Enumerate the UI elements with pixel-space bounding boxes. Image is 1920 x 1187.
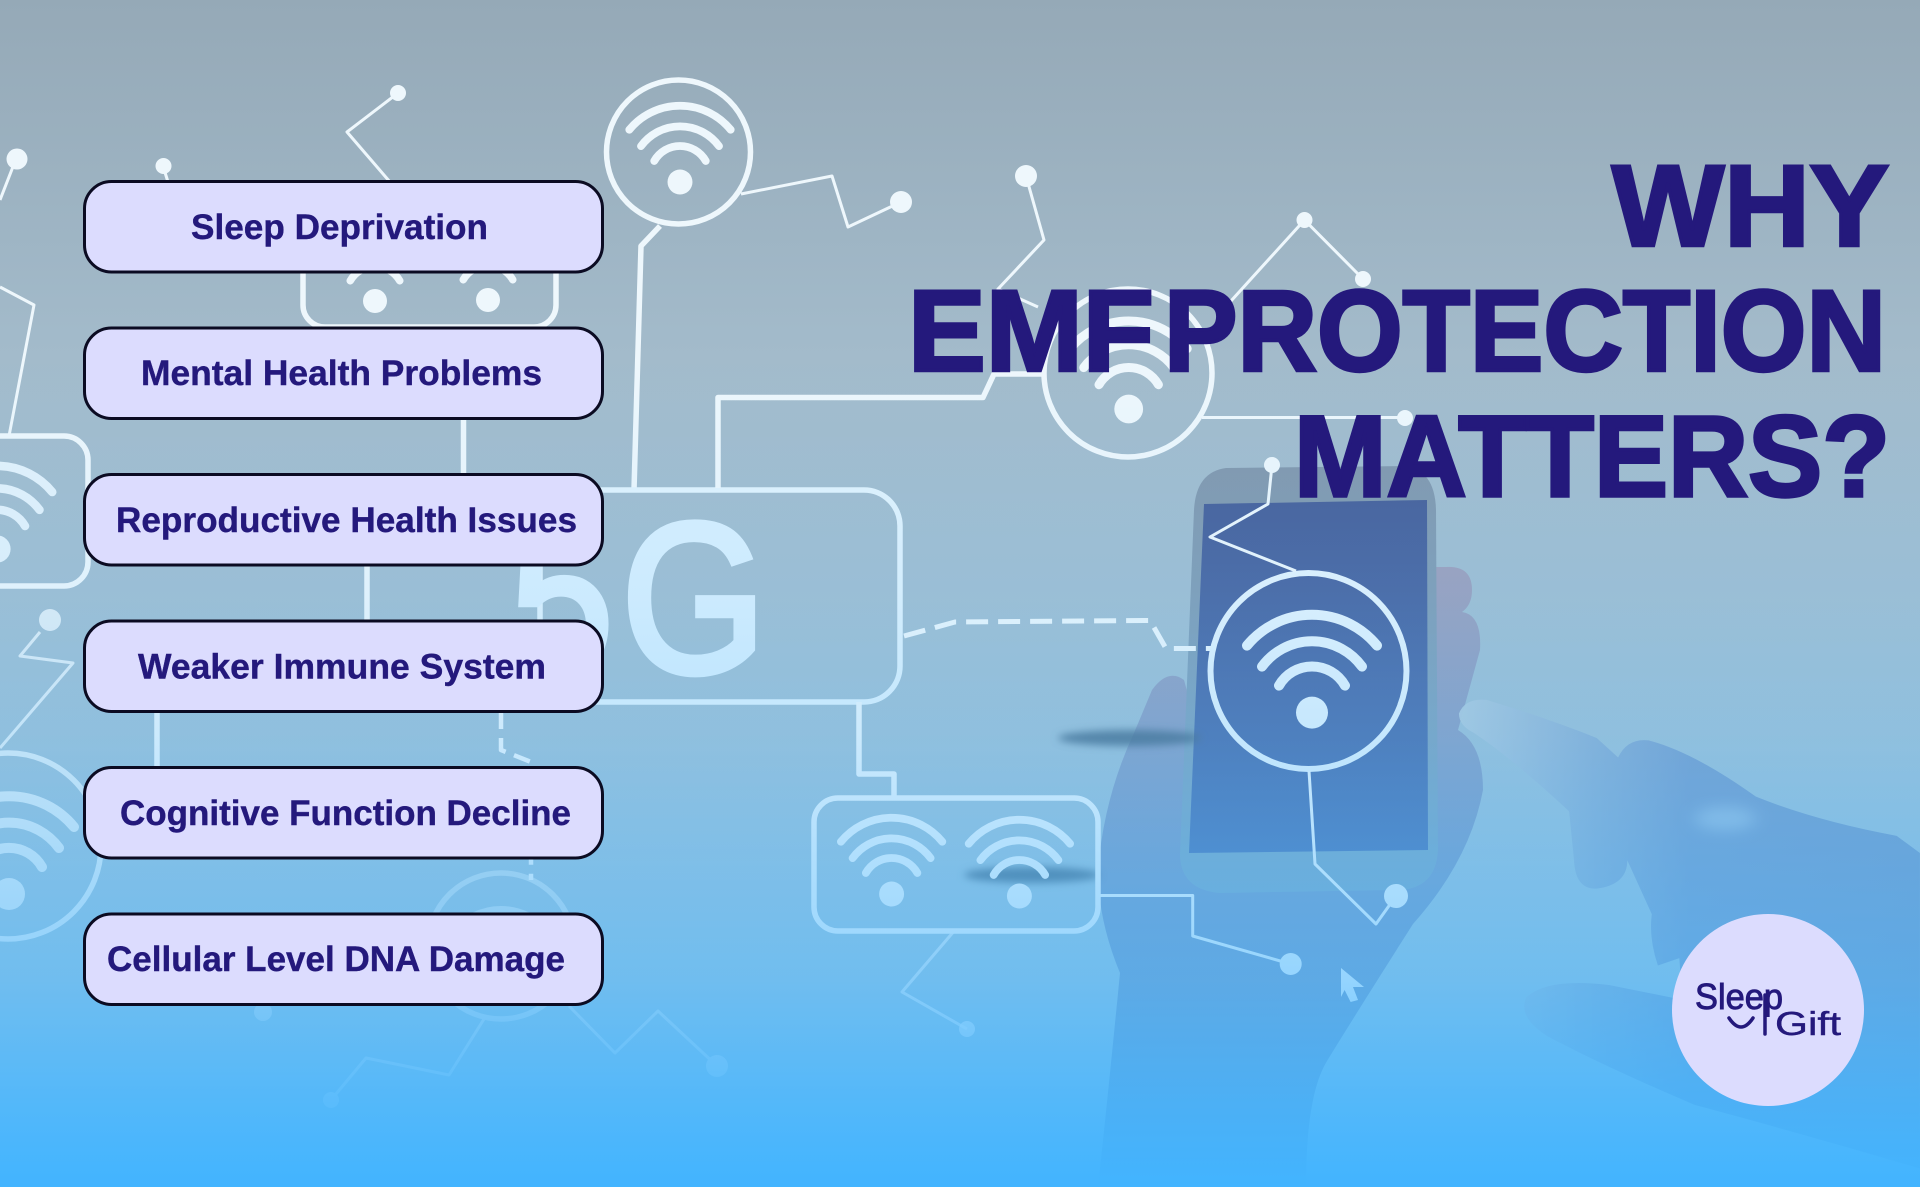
button: mental health problems [84, 328, 602, 418]
button: reproductive health issues [84, 474, 602, 565]
wifi device box: left edge [0, 436, 88, 586]
network diagram decoration [0, 80, 1413, 1108]
phone body [1180, 466, 1438, 893]
wifi circle: top [606, 80, 912, 490]
button: cognitive function decline [84, 768, 602, 858]
wifi circle: on phone screen [1210, 457, 1408, 924]
button: weaker immune system [84, 621, 602, 712]
button: cellular level DNA damage: Cellular Level DNA Damage [107, 940, 565, 979]
wifi circle: left edge [0, 609, 101, 939]
button: reproductive health issues: Reproductive Health Issues [116, 501, 577, 540]
logo: SleepGift badge [1672, 914, 1864, 1106]
button: cognitive function decline: Cognitive Function Decline [120, 794, 571, 833]
icon: mouse cursor [1341, 968, 1364, 1002]
wifi circle: centre, behind title [998, 165, 1413, 457]
node: top left branches [0, 85, 406, 436]
left hand [1098, 567, 1483, 1187]
button: mental health problems: Mental Health Problems [141, 354, 542, 393]
logo: SleepGift badge: Gift [1775, 1005, 1841, 1042]
title: EMF [908, 268, 1154, 396]
button: cellular level DNA damage [84, 914, 602, 1004]
panel: list of health risks [84, 182, 602, 1004]
photo: hands holding smartphone [964, 466, 1920, 1187]
button: sleep deprivation: Sleep Deprivation [191, 208, 488, 247]
right hand [1459, 700, 1920, 1168]
button: sleep deprivation [84, 182, 602, 272]
wifi device box: behind first button [303, 227, 556, 476]
finger smudges [964, 730, 1202, 883]
wifi circle: lower left, behind buttons [254, 873, 728, 1108]
5G box [157, 374, 1211, 880]
title: WHY [1612, 142, 1889, 270]
phone screen [1189, 500, 1428, 853]
5G box: 5G [510, 478, 774, 718]
button: weaker immune system: Weaker Immune System [138, 648, 546, 686]
logo: SleepGift badge: Sleep [1695, 976, 1783, 1017]
title: PROTECTION [1164, 268, 1886, 396]
title: MATTERS? [1294, 393, 1890, 521]
title [908, 142, 1890, 521]
wifi device box: lower centre [814, 798, 1302, 1037]
